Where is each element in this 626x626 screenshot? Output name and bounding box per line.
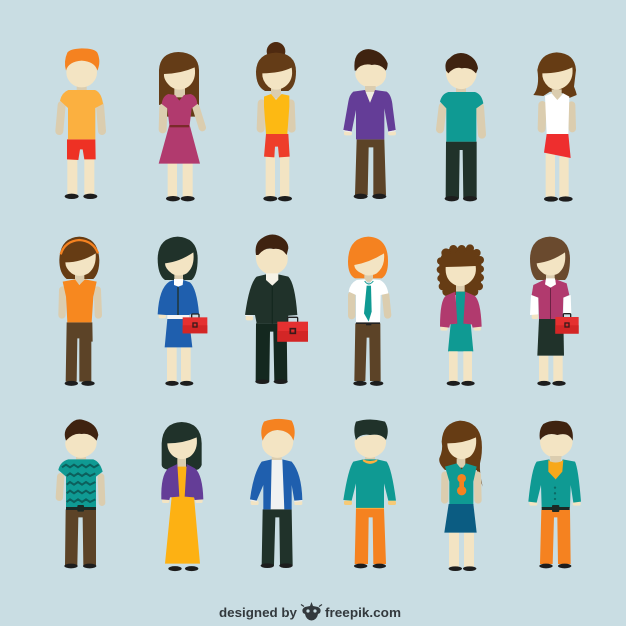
figure: businessman in dark suit with briefcase xyxy=(245,234,308,384)
credit: designed by freepik.com xyxy=(219,602,401,620)
figure: woman with hair bun in yellow top and red shorts xyxy=(256,42,296,201)
figure: boy in yellow t-shirt and red shorts xyxy=(59,48,103,199)
figure: red-haired man in blue jacket and white t-shirt xyxy=(250,419,302,568)
figure: man in teal jacket with gold waistcoat and orange trousers xyxy=(528,421,581,568)
icon: freepik logo xyxy=(301,602,322,620)
figure: man in patterned teal t-shirt xyxy=(58,419,103,568)
figure: man in teal t-shirt xyxy=(440,53,483,201)
figure: woman in white top and red skirt xyxy=(533,52,577,202)
icon: red briefcase xyxy=(555,314,579,334)
figure: man in purple sweater xyxy=(343,49,396,199)
figure: woman with headband in orange top xyxy=(59,237,99,386)
figure: man in teal sweater and orange trousers xyxy=(343,419,396,568)
figure: woman with wavy hair in teal top and blue skirt xyxy=(439,421,483,571)
figure: red-haired woman in white shirt with teal tie xyxy=(348,237,388,386)
icon: red briefcase xyxy=(277,317,308,342)
figure: woman in purple jacket and long yellow dress xyxy=(161,422,203,571)
figure: businesswoman in pink top and dark skirt with briefcase xyxy=(530,237,579,386)
figure: curly-haired woman in pink jacket and teal skirt xyxy=(437,244,484,386)
credit: designed by freepik.com: freepik.com xyxy=(325,605,401,620)
figure: woman in magenta dress xyxy=(159,52,202,201)
figure: businesswoman in blue suit with briefcase xyxy=(158,237,207,386)
icon: red briefcase xyxy=(183,314,207,333)
credit: designed by freepik.com: designed by xyxy=(219,605,298,620)
